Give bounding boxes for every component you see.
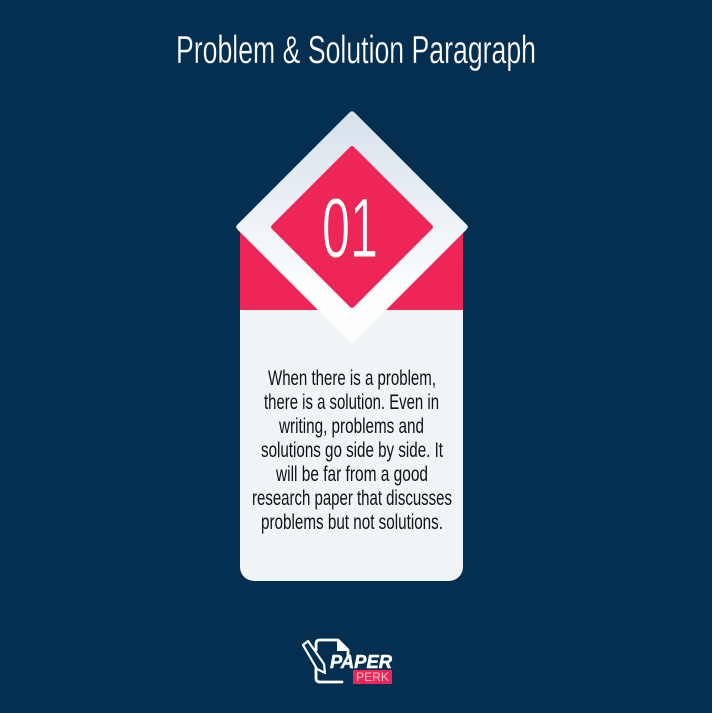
- red diamond: [271, 146, 433, 308]
- body text: solutions go side by side. It: [261, 438, 443, 462]
- body text: problems but not solutions.: [261, 510, 443, 534]
- number: 01: [322, 181, 378, 275]
- logo: PERK: [356, 672, 389, 684]
- card body: [240, 310, 463, 581]
- body text: there is a solution. Even in: [264, 390, 439, 414]
- logo badge PERK: [353, 670, 392, 684]
- icon: pencil: [303, 641, 325, 673]
- body text: research paper that discusses: [252, 486, 452, 510]
- logo: [303, 640, 393, 684]
- diamond frame: [236, 111, 468, 343]
- body text: writing, problems and: [278, 414, 424, 438]
- card red envelope flap: [240, 225, 463, 311]
- panel: card: [236, 111, 468, 581]
- logo word PAPER: PAPER: [330, 651, 393, 672]
- icon: document: [316, 640, 348, 682]
- body text: [252, 366, 452, 534]
- body text: When there is a problem,: [268, 366, 436, 390]
- body text: will be far from a good: [275, 462, 428, 486]
- title: Problem & Solution Paragraph: [176, 29, 536, 72]
